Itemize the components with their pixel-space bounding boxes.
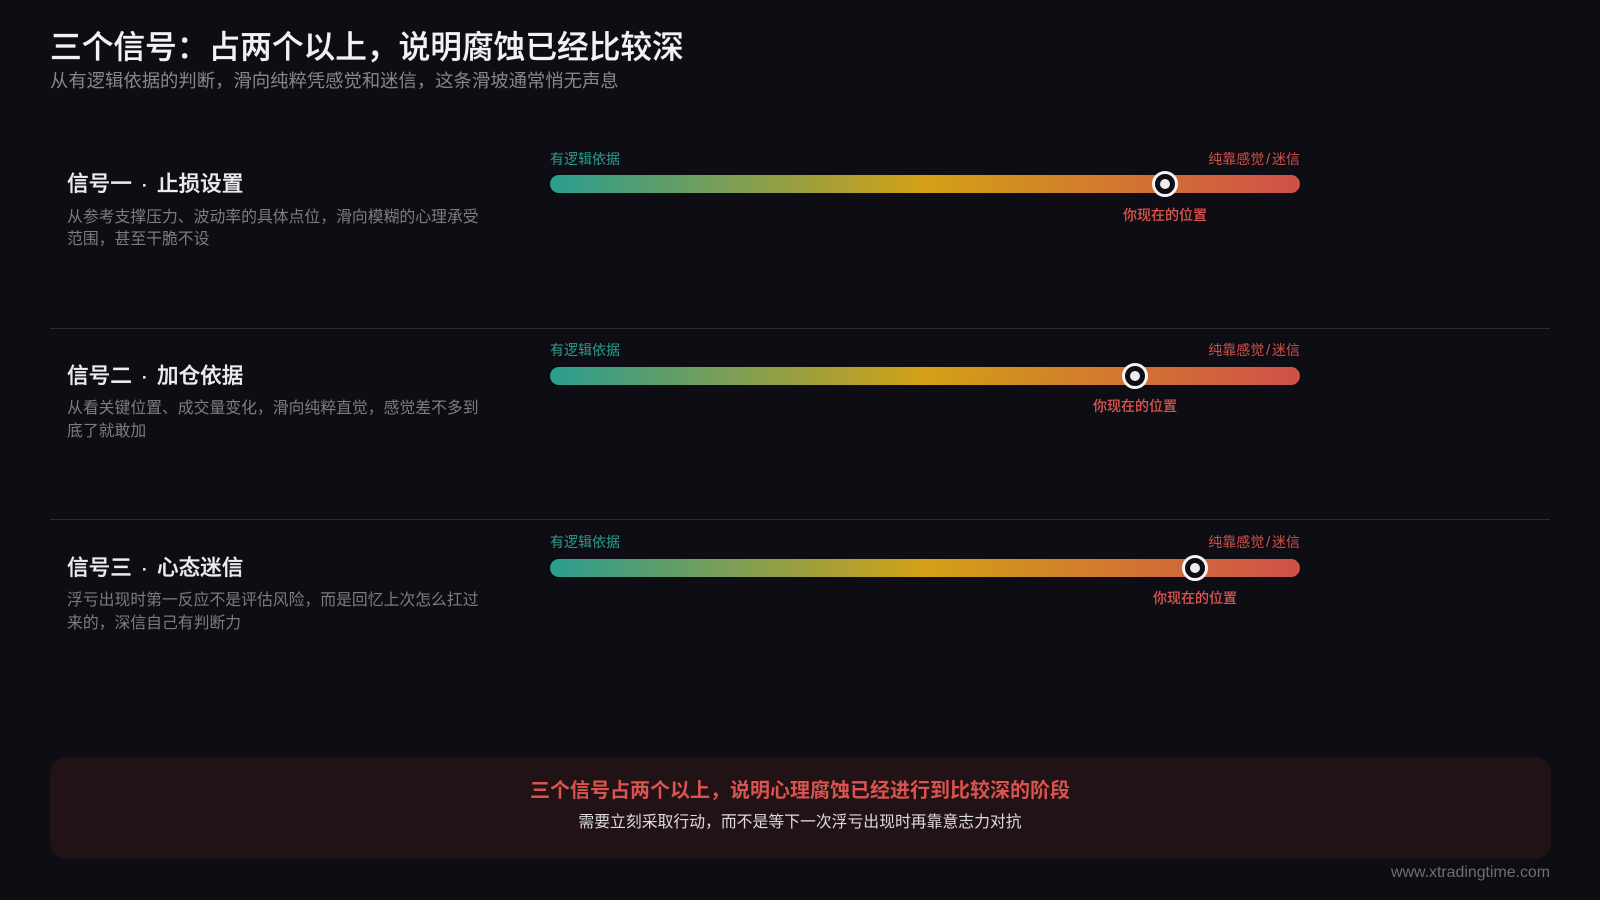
heading: signal three: 信号三 · 心态迷信 bbox=[67, 555, 243, 580]
panel: signal two bbox=[67, 342, 1300, 440]
panel: signal three bbox=[67, 534, 1300, 632]
description: signal two: 从看关键位置、成交量变化，滑向纯粹直觉，感觉差不多到底了就敢加 bbox=[67, 400, 479, 440]
heading: signal two: 信号二 · 加仓依据 bbox=[67, 363, 243, 388]
description: signal one: 从参考支撑压力、波动率的具体点位，滑向模糊的心理承受范围，甚至干脆不设 bbox=[67, 209, 479, 248]
marker bbox=[1122, 363, 1148, 389]
heading: signal one: 信号一 · 止损设置 bbox=[67, 171, 243, 196]
subtitle: 从有逻辑依据的判断，滑向纯粹凭感觉和迷信，这条滑坡通常悄无声息 bbox=[50, 70, 619, 91]
label: logic end: 有逻辑依据 bbox=[550, 342, 620, 358]
marker bbox=[1152, 171, 1178, 197]
position label: 你现在的位置 bbox=[1153, 590, 1237, 606]
callout text: 需要立刻采取行动，而不是等下一次浮亏出现时再靠意志力对抗 bbox=[578, 814, 1022, 830]
gradient bar bbox=[550, 559, 1300, 577]
callout heading: 三个信号占两个以上，说明心理腐蚀已经进行到比较深的阶段 bbox=[530, 780, 1070, 802]
gradient bar bbox=[550, 175, 1300, 193]
description: signal three: 浮亏出现时第一反应不是评估风险，而是回忆上次怎么扛过来的，深信自己有判断力 bbox=[67, 592, 479, 632]
label: logic end: 有逻辑依据 bbox=[550, 150, 620, 166]
label: superstition end: 纯靠感觉/迷信 bbox=[1208, 534, 1300, 551]
gradient bar bbox=[550, 367, 1300, 385]
title: 三个信号：占两个以上，说明腐蚀已经比较深 bbox=[50, 29, 684, 65]
panel: signal one bbox=[67, 150, 1300, 248]
footer url: www.xtradingtime.com bbox=[1391, 864, 1550, 880]
panel: conclusion callout bbox=[50, 757, 1551, 859]
label: superstition end: 纯靠感觉/迷信 bbox=[1208, 150, 1300, 168]
position label: 你现在的位置 bbox=[1123, 206, 1207, 222]
marker bbox=[1182, 555, 1208, 581]
label: logic end: 有逻辑依据 bbox=[550, 534, 620, 550]
label: superstition end: 纯靠感觉/迷信 bbox=[1208, 342, 1300, 359]
position label: 你现在的位置 bbox=[1093, 398, 1177, 414]
